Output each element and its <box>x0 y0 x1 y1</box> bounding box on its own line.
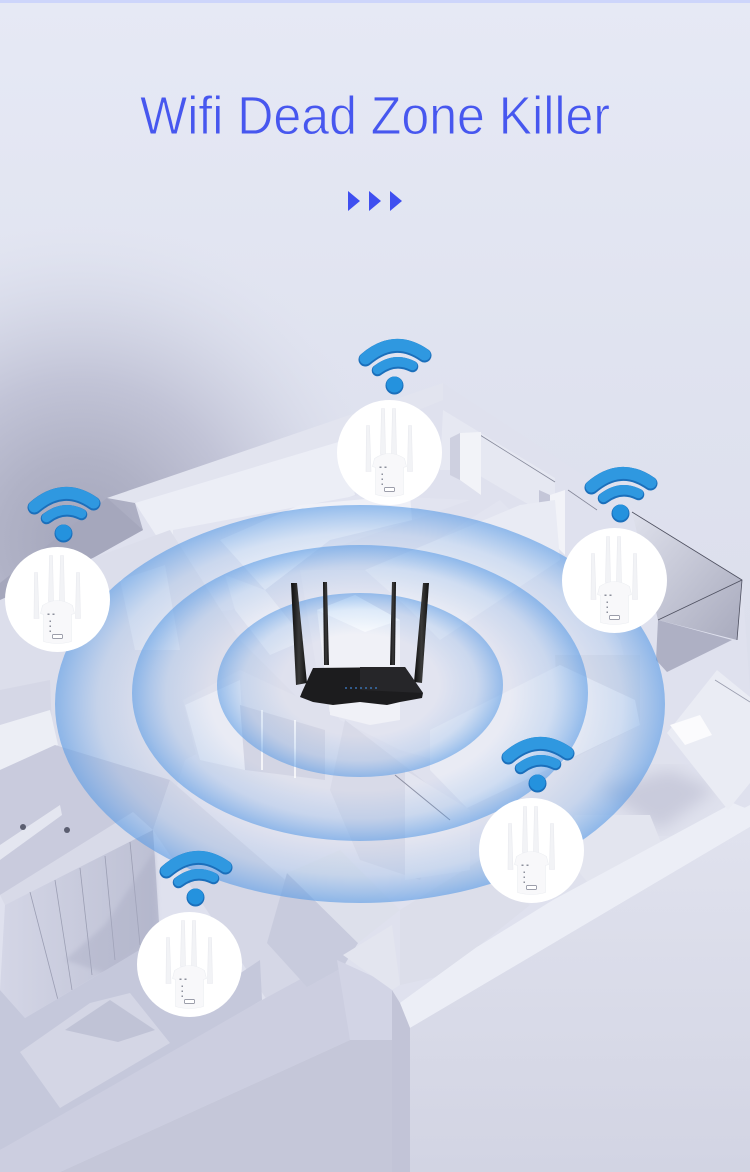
wall top strip <box>0 383 443 583</box>
router body <box>300 667 423 705</box>
sofa room <box>135 440 470 655</box>
left column wall <box>0 530 300 840</box>
left lower room <box>0 680 170 895</box>
arrows <box>348 191 402 211</box>
glass wall back <box>440 410 742 672</box>
repeater: left <box>5 493 110 652</box>
title: Wifi Dead Zone Killer <box>140 86 610 146</box>
pit wedge <box>0 498 143 602</box>
wardrobe <box>0 812 160 1018</box>
floor plan scene <box>0 383 750 1172</box>
repeater: lower left <box>137 857 242 1017</box>
router <box>291 582 429 705</box>
signal rings <box>55 505 665 903</box>
repeater: right <box>562 473 667 633</box>
bed <box>20 993 170 1108</box>
right small room <box>667 670 750 810</box>
lower wall <box>0 955 350 1172</box>
center cabinets <box>183 500 640 880</box>
repeater: lower right <box>479 743 584 903</box>
antennas <box>291 582 429 685</box>
repeater: top <box>337 345 442 505</box>
inner ring <box>217 593 503 777</box>
middle ring <box>132 545 588 841</box>
diagonal wall <box>153 780 358 1000</box>
bedroom floor <box>0 938 262 1150</box>
building floor <box>0 383 750 1172</box>
right bedroom <box>400 723 750 1003</box>
status lights <box>345 687 377 689</box>
outer ring <box>55 505 665 903</box>
corner wall <box>392 805 750 1172</box>
center lower room <box>267 850 400 1040</box>
